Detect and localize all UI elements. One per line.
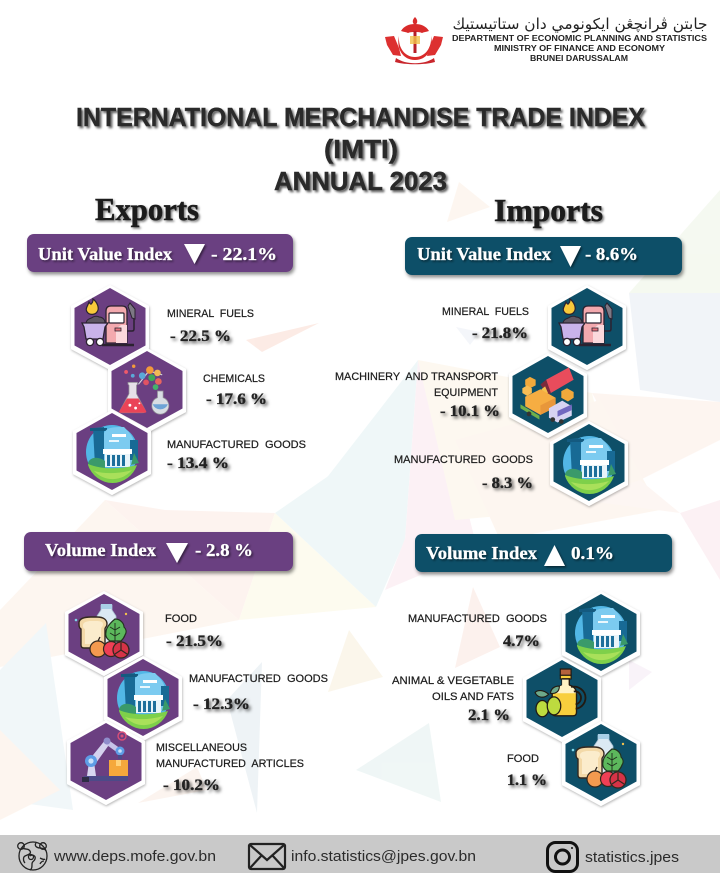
heading: Exports: Exports xyxy=(95,191,199,227)
exports volume: manufactured goods label: - 12.3% xyxy=(193,696,250,713)
text: email: info.statistics@jpes.gov.bn xyxy=(291,848,476,865)
exports unit value: manufactured goods label xyxy=(167,439,306,472)
icon: envelope xyxy=(249,844,285,869)
exports unit value: manufactured goods hexagon icon xyxy=(73,410,151,495)
panel: imports unit value index xyxy=(405,237,682,275)
exports volume: food label xyxy=(165,613,223,650)
imports unit value: machinery and transport label: EQUIPMENT xyxy=(434,387,498,399)
imports unit value: machinery and transport label: - 10.1 % xyxy=(440,403,500,420)
exports unit value: mineral fuels label: MINERAL FUELS xyxy=(167,308,254,320)
panel: imports unit value index: Unit Value Index xyxy=(417,244,551,264)
imports unit value: manufactured goods hexagon icon xyxy=(550,421,628,506)
imports unit value: manufactured goods label: - 8.3 % xyxy=(482,475,533,492)
imports unit value: mineral fuels label: MINERAL FUELS xyxy=(442,306,529,318)
imports volume: manufactured goods label: 4.7% xyxy=(503,633,540,650)
imports volume: animal and vegetable oils label xyxy=(392,675,514,724)
exports volume: miscellaneous manufactured articles label: MANUFACTURED ARTICLES xyxy=(156,758,304,770)
panel: imports volume index xyxy=(415,534,672,572)
imports volume: food hexagon icon xyxy=(562,721,640,806)
panel: imports unit value index: - 8.6% xyxy=(585,244,638,264)
panel: imports volume index: Volume Index xyxy=(426,543,537,563)
exports volume: food label: FOOD xyxy=(165,613,197,625)
exports unit value: manufactured goods label: - 13.4 % xyxy=(167,455,229,472)
exports unit value: chemicals hexagon icon xyxy=(108,348,186,433)
header: department names: MINISTRY OF FINANCE AND ECONOMY xyxy=(494,44,666,53)
header: department names xyxy=(452,15,708,63)
exports unit value: mineral fuels label: - 22.5 % xyxy=(170,328,231,345)
exports volume: manufactured goods label xyxy=(189,673,328,713)
exports unit value: chemicals label xyxy=(203,373,267,408)
imports unit value: mineral fuels label: - 21.8% xyxy=(472,325,528,342)
exports volume: food hexagon icon xyxy=(65,591,143,676)
imports unit value: manufactured goods label xyxy=(394,454,533,492)
imports volume: manufactured goods label xyxy=(408,613,547,650)
exports volume: manufactured goods hexagon icon xyxy=(104,656,182,741)
title: INTERNATIONAL MERCHANDISE TRADE INDEX xyxy=(76,102,646,132)
panel: exports volume index xyxy=(24,532,293,571)
exports unit value: chemicals label: - 17.6 % xyxy=(206,391,267,408)
text: instagram handle: statistics.jpes xyxy=(585,849,679,866)
panel: exports volume index: - 2.8 % xyxy=(195,540,253,560)
imports volume: manufactured goods hexagon icon xyxy=(562,591,640,676)
title xyxy=(76,102,646,196)
title: (IMTI) xyxy=(324,134,398,164)
imports unit value: machinery and transport hexagon icon xyxy=(509,353,587,438)
header: ministry emblem xyxy=(385,17,443,64)
exports unit value: mineral fuels label xyxy=(167,308,254,345)
exports volume: miscellaneous manufactured articles label xyxy=(156,742,304,794)
header: department names: DEPARTMENT OF ECONOMIC PLANNING AND STATISTICS xyxy=(452,34,708,43)
panel: exports unit value index xyxy=(27,234,293,272)
panel: exports unit value index: Unit Value Index xyxy=(38,244,172,264)
imports volume: animal and vegetable oils label: OILS AND FATS xyxy=(432,691,514,703)
imports volume: animal and vegetable oils label: 2.1 % xyxy=(468,707,510,724)
exports volume: food label: - 21.5% xyxy=(166,633,223,650)
imports unit value: manufactured goods label: MANUFACTURED GOODS xyxy=(394,454,533,466)
imports volume: manufactured goods label: MANUFACTURED GOODS xyxy=(408,613,547,625)
imports unit value: machinery and transport label xyxy=(335,371,500,420)
exports volume: manufactured goods label: MANUFACTURED GOODS xyxy=(189,673,328,685)
header: department names: جابتن ڤرانچڠن ايكونومي دان ستاتيستيك xyxy=(452,15,708,34)
imports volume: food label: FOOD xyxy=(507,753,539,765)
icon: instagram xyxy=(548,842,578,872)
exports unit value: manufactured goods label: MANUFACTURED GOODS xyxy=(167,439,306,451)
header: department names: BRUNEI DARUSSALAM xyxy=(530,54,628,63)
imports volume: food label xyxy=(507,753,547,789)
exports volume: miscellaneous manufactured articles hexagon icon xyxy=(67,720,145,805)
imports volume: food label: 1.1 % xyxy=(507,772,547,789)
imports volume: animal and vegetable oils hexagon icon xyxy=(523,657,601,742)
exports volume: miscellaneous manufactured articles label: MISCELLANEOUS xyxy=(156,742,247,754)
icon: globe with pins xyxy=(18,842,47,870)
imports unit value: mineral fuels label xyxy=(442,306,529,342)
imports volume: animal and vegetable oils label: ANIMAL & VEGETABLE xyxy=(392,675,514,687)
panel: exports unit value index: - 22.1% xyxy=(211,244,277,264)
footer bar xyxy=(0,835,720,873)
heading: Imports: Imports xyxy=(494,192,603,228)
title: ANNUAL 2023 xyxy=(274,166,447,196)
text: website: www.deps.mofe.gov.bn xyxy=(53,848,216,865)
exports volume: miscellaneous manufactured articles label: - 10.2% xyxy=(163,777,220,794)
imports unit value: machinery and transport label: MACHINERY AND TRANSPORT xyxy=(335,371,498,383)
exports unit value: mineral fuels hexagon icon xyxy=(71,285,149,370)
imports unit value: mineral fuels hexagon icon xyxy=(548,285,626,370)
panel: imports volume index: 0.1% xyxy=(571,543,614,563)
exports unit value: chemicals label: CHEMICALS xyxy=(203,373,265,385)
panel: exports volume index: Volume Index xyxy=(45,540,156,560)
